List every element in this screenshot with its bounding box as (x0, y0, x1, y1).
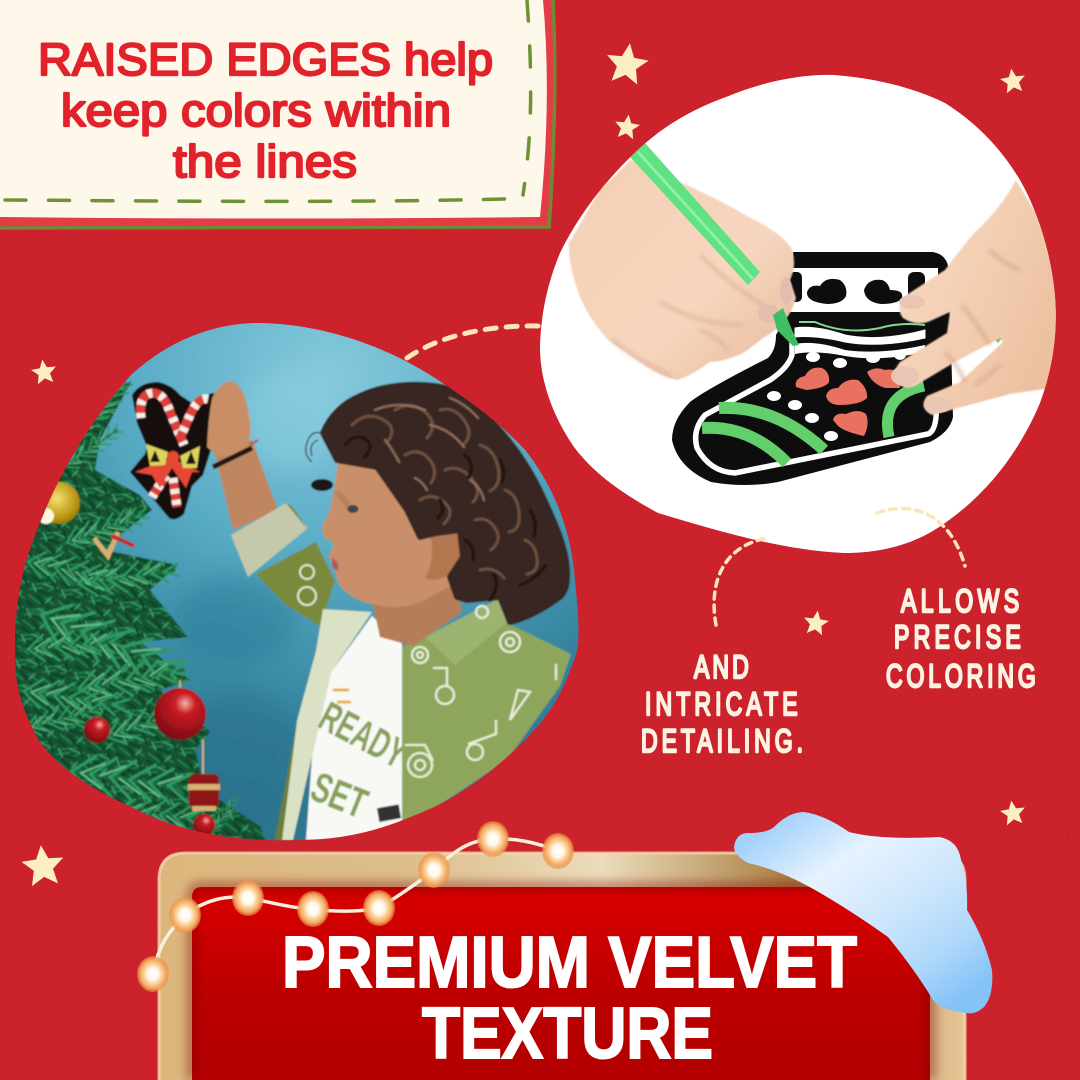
photo: hands colouring velvet stocking (540, 75, 1060, 553)
caption: allows precise coloring: ALLOWS (901, 583, 1019, 619)
photo: child hanging ornament on tree (0, 310, 600, 850)
white velvet dots (767, 350, 906, 441)
gold framed banner (159, 853, 965, 1080)
tree ornaments (38, 482, 220, 836)
left hand holding pen (569, 160, 796, 380)
child: white t-shirt with print: READY (312, 692, 415, 777)
banner title: PREMIUM VELVET (282, 923, 857, 1003)
string of fairy lights (137, 821, 574, 992)
child: white t-shirt with print (305, 616, 415, 840)
note card text: RAISED EDGES help (38, 34, 493, 85)
coloured green stripes (719, 408, 824, 450)
caption: allows precise coloring (886, 583, 1036, 694)
child: neck (372, 578, 462, 646)
caption: allows precise coloring: COLORING (886, 658, 1036, 694)
dashed connector: to detailing label (714, 538, 768, 625)
christmas tree (0, 373, 266, 842)
coloured coral hearts (796, 368, 900, 436)
note card: raised edges (0, 0, 555, 228)
banner title: TEXTURE (422, 994, 713, 1074)
snow cap on banner corner (734, 812, 992, 1013)
note card text: the lines (173, 136, 357, 187)
green felt pen (630, 143, 799, 346)
child: light overshirt panel (282, 609, 372, 840)
child: curly hair (306, 385, 567, 622)
dashed connector: photo to stocking photo (407, 326, 538, 358)
caption: and intricate detailing: AND (694, 649, 749, 685)
child: green shirt with tractor print (402, 598, 571, 830)
caption: and intricate detailing: INTRICATE (645, 686, 798, 722)
caption: and intricate detailing (641, 649, 803, 759)
caption: allows precise coloring: PRECISE (894, 619, 1021, 655)
child: white t-shirt with print: SET (305, 763, 374, 827)
note card text (38, 34, 493, 187)
caption: and intricate detailing: DETAILING. (641, 723, 803, 759)
banner title (282, 923, 857, 1074)
child: sleeve and cuff (231, 503, 335, 626)
dashed connector: to precise label (877, 509, 965, 566)
note card text: keep colors within (61, 85, 451, 136)
child: face profile (321, 462, 461, 608)
wall backdrop (94, 323, 578, 840)
child: arm and hand (207, 381, 278, 530)
candy cane velvet ornament (130, 382, 218, 519)
velvet stocking (672, 252, 953, 485)
child: olive shirt edge (275, 721, 297, 840)
right hand holding stocking (891, 180, 1060, 415)
stars scattered on background (20, 40, 1027, 887)
